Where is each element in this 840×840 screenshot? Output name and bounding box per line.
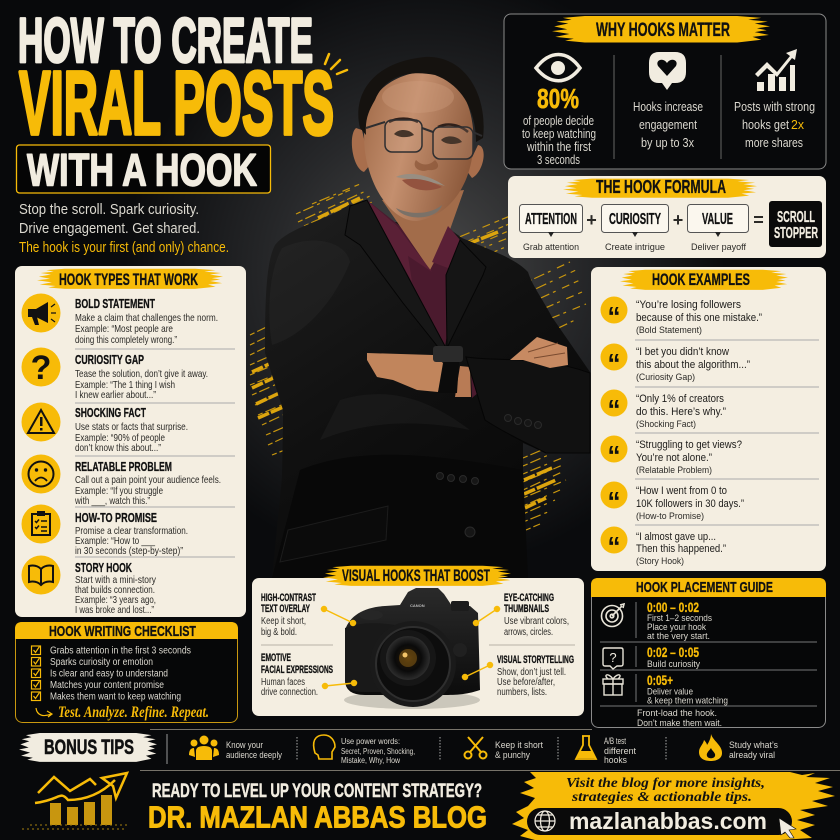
stat: shares (734, 49, 815, 150)
lapels (345, 200, 445, 352)
shirt (367, 200, 460, 346)
jacket cuff (466, 357, 590, 453)
stat: shares: more shares (745, 136, 803, 150)
plus: + (586, 210, 597, 230)
callout: visual storytelling: VISUAL STORYTELLING (497, 654, 574, 666)
stat: 80 percent: 3 seconds (537, 153, 580, 167)
heading banner: HOOK TYPES THAT WORK (59, 270, 198, 289)
formula: value (688, 204, 748, 253)
quote marks: “ (608, 348, 620, 378)
callout: emotive facial expressions (261, 652, 333, 698)
panel: why hooks matter (504, 14, 826, 169)
sleeve highlight (320, 394, 470, 440)
icon: open book (22, 556, 60, 594)
tip: ab test: A/B test (604, 736, 626, 746)
callout: high-contrast text overlay: Keep it short, (261, 616, 306, 627)
formula: curiosity: Create intrigue (605, 242, 665, 253)
callout: eye-catching thumbnails: THUMBNAILS (504, 603, 549, 615)
example quotes: 10K followers in 30 days.” (636, 498, 744, 510)
example quotes: do this. Here’s why.” (636, 406, 726, 418)
placement note: Front-load the hook. (637, 708, 717, 719)
placement header: HOOK PLACEMENT GUIDE (636, 579, 773, 596)
checklist items: Grabs attention in the first 3 seconds (50, 646, 191, 656)
callout: high-contrast text overlay: TEXT OVERLAY (261, 603, 310, 615)
hand (510, 337, 568, 368)
title line 2: VIRAL POSTS (19, 54, 334, 154)
hook type: how-to promise: Example: “How to ___ (75, 535, 155, 547)
title line 3 box: WITH A HOOK (27, 144, 257, 196)
tip: study: already viral (729, 750, 775, 761)
example quotes: this about the algorithm...” (636, 359, 750, 371)
hook type: story hook: that builds connection. (75, 584, 155, 596)
cuff buttons (436, 414, 542, 537)
stat: 80 percent: 80% (537, 83, 579, 114)
lower jacket shadow (272, 455, 528, 578)
hook type: how-to promise: HOW-TO PROMISE (75, 510, 157, 525)
title (16, 6, 347, 256)
placement step 2: 0:02 – 0:05 (647, 644, 699, 660)
quote marks: “ (608, 486, 620, 516)
url pill: mazlanabbas.com (569, 808, 767, 834)
icon: cursor (779, 818, 796, 838)
example tags: (Bold Statement) (636, 325, 702, 336)
placement step 1 (647, 599, 712, 642)
nose (415, 160, 438, 171)
collar (367, 200, 460, 282)
person portrait (265, 57, 590, 578)
hook type: bold statement: doing this completely wrong.” (75, 334, 177, 346)
hook type: story hook: Start with a mini-story (75, 574, 157, 586)
connector lines (322, 606, 500, 688)
illustration: camera: CANON (410, 603, 425, 608)
hook type: bold statement: Example: “Most people are (75, 323, 173, 335)
quote marks: “ (608, 301, 620, 331)
stat: shares: Posts with strong (734, 100, 815, 114)
example quotes: because of this one mistake.” (636, 312, 762, 324)
brush panel with link: Visit the blog for more insights, (566, 776, 765, 791)
callout: eye-catching thumbnails: arrows, circles. (504, 627, 553, 638)
quote marks (608, 301, 620, 561)
tip: power words: Use power words: (341, 736, 400, 746)
callout: emotive facial expressions: drive connection. (261, 687, 318, 698)
example quotes (636, 299, 762, 555)
hook type: bold statement (22, 294, 218, 346)
tip: short: & punchy (495, 750, 530, 761)
bonus tips banner: BONUS TIPS (44, 736, 134, 759)
example quotes: “I bet you didn’t know (636, 346, 729, 358)
hook type: shocking fact (22, 402, 188, 454)
panel: hook placement guide (591, 578, 826, 729)
hook type: shocking fact: Use stats or facts that surprise. (75, 421, 188, 433)
hook type: shocking fact: don’t know this about...” (75, 442, 161, 454)
icon: people (189, 736, 219, 760)
panel: visual hooks (252, 566, 584, 716)
hook type: curiosity gap: Tease the solution, don’t give it away. (75, 368, 208, 380)
icon: question mark (22, 348, 60, 387)
hook type: bold statement: BOLD STATEMENT (75, 296, 155, 311)
tip: study: Study what’s (729, 740, 778, 751)
hook type: curiosity gap: I knew earlier about...” (75, 389, 156, 401)
finger lines (528, 343, 565, 358)
heading banner: VISUAL HOOKS THAT BOOST (342, 566, 490, 585)
icon: question bubble (603, 648, 623, 669)
icon: clipboard (22, 504, 60, 544)
placement step 1: 0:00 – 0:02 (647, 599, 699, 615)
callout: visual storytelling (497, 654, 574, 698)
placement step 1: at the very start. (647, 631, 710, 642)
heading banner: THE HOOK FORMULA (596, 177, 726, 197)
hook type: curiosity gap: Example: “The 1 thing I wish (75, 379, 175, 391)
spotlight glow (110, 0, 740, 600)
hook type: how-to promise: in 30 seconds (step-by-step)” (75, 545, 183, 557)
formula: attention (520, 204, 582, 253)
jacket (265, 204, 590, 578)
example quotes: “How I went from 0 to (636, 485, 727, 497)
glasses (366, 120, 482, 159)
result: scroll stopper (769, 201, 822, 247)
hook type: curiosity gap: CURIOSITY GAP (75, 352, 144, 367)
icon: heart bubble (649, 52, 686, 90)
placement step 2 (647, 644, 700, 670)
formula: value: Deliver payoff (691, 242, 746, 253)
heading banner (37, 269, 223, 289)
tip: ab test (576, 736, 636, 765)
callout: eye-catching thumbnails (504, 592, 569, 638)
heading banner: HOOK EXAMPLES (652, 270, 750, 289)
mouth (402, 179, 442, 190)
heading banner: WHY HOOKS MATTER (596, 20, 730, 41)
callout: eye-catching thumbnails: Use vibrant colors, (504, 616, 569, 627)
callout: high-contrast text overlay (261, 592, 316, 638)
hook type: story hook: STORY HOOK (75, 560, 132, 575)
tip: short: Keep it short (495, 740, 543, 751)
hook type: relatable problem: RELATABLE PROBLEM (75, 459, 172, 474)
icon: gift (603, 675, 623, 695)
stat: shares: 2x (791, 118, 805, 132)
icon: scissors (464, 737, 486, 758)
callout: high-contrast text overlay: big & bold. (261, 627, 297, 638)
placement step 3: Deliver value (647, 686, 693, 698)
hook type: story hook: Example: “3 years ago, (75, 594, 156, 606)
checklist items (50, 646, 191, 702)
formula: attention: Grab attention (523, 242, 579, 253)
forehead highlight (382, 81, 454, 113)
hook type: relatable problem: with ___, watch this.” (74, 495, 150, 507)
example tags: (Curiosity Gap) (636, 372, 695, 383)
formula: value: VALUE (702, 211, 733, 228)
checklist items: Is clear and easy to understand (50, 668, 168, 680)
example quotes: “I almost gave up... (636, 531, 716, 543)
formula: curiosity: CURIOSITY (609, 211, 661, 228)
shirt cuff (471, 372, 479, 398)
stat: engagement: Hooks increase (633, 100, 703, 114)
placement note (637, 708, 722, 729)
callout: visual storytelling: numbers, lists. (497, 687, 547, 698)
example quotes: “Only 1% of creators (636, 393, 724, 405)
brush panel with link: strategies & actionable tips. (571, 790, 752, 805)
placement step 3: 0:05+ (647, 672, 673, 688)
quote marks: “ (608, 531, 620, 561)
example quotes: “Struggling to get views? (636, 439, 742, 451)
checklist items: Makes them want to keep watching (50, 692, 181, 702)
hair (358, 57, 484, 142)
hook type: how-to promise (22, 504, 188, 557)
callout: emotive facial expressions: FACIAL EXPRESSIONS (261, 664, 333, 676)
brush panel with link (512, 772, 835, 840)
stat: 80 percent: of people decide (523, 114, 594, 128)
jacket shoulder highlight (269, 240, 350, 345)
icon: globe (535, 811, 555, 831)
icon: sad face (22, 454, 60, 494)
formula: curiosity (602, 204, 668, 253)
watch (433, 346, 463, 393)
tip: study (699, 734, 778, 761)
tip: ab test: different (604, 746, 636, 756)
tip: audience: audience deeply (226, 750, 282, 761)
section: call to action (22, 772, 835, 840)
bonus tips banner (19, 733, 157, 762)
placement step 1: Place your hook (647, 622, 706, 633)
hook type: relatable problem: Call out a pain point your audience feels. (75, 474, 221, 486)
pocket (280, 506, 388, 562)
hook type: curiosity gap (22, 348, 208, 401)
arrow (36, 708, 52, 717)
checklist header: HOOK WRITING CHECKLIST (49, 623, 196, 640)
icon: question bubble: ? (609, 650, 617, 665)
panel: hook types (15, 266, 246, 617)
stat: 80 percent: to keep watching (522, 127, 596, 141)
result: scroll stopper: SCROLL (777, 209, 815, 226)
eyebrows (389, 119, 468, 132)
hook type: relatable problem: Example: “If you struggle (75, 485, 163, 497)
cta name: DR. MAZLAN ABBAS BLOG (148, 800, 487, 834)
heading banner (552, 16, 770, 43)
forearm (367, 353, 443, 392)
illustration: camera (344, 588, 480, 709)
hook type: story hook (22, 556, 157, 616)
example tags: (How-to Promise) (636, 511, 704, 522)
spark icon (325, 54, 347, 74)
tip: power words: Mistake, Why, How (341, 756, 400, 765)
icon: question mark: ? (31, 349, 51, 387)
icon: target (602, 604, 624, 626)
tagline: Drive engagement. Get shared. (19, 221, 200, 237)
quote marks: “ (608, 440, 620, 470)
tip: short (464, 737, 543, 761)
hook type: relatable problem (22, 454, 221, 507)
panel: hook examples (591, 267, 826, 571)
hook type: bold statement: Make a claim that challenges the norm. (75, 312, 218, 324)
title line 1: HOW TO CREATE (18, 6, 313, 76)
icon: head (314, 735, 335, 759)
example tags (636, 325, 712, 567)
example tags: (Story Hook) (636, 556, 684, 567)
checklist items: Matches your content promise (50, 680, 164, 691)
cta heading: READY TO LEVEL UP YOUR CONTENT STRATEGY? (152, 780, 482, 802)
wrist (455, 366, 471, 397)
stat: engagement: engagement (639, 118, 697, 132)
stat: 80 percent: within the first (526, 140, 591, 154)
tagline (19, 202, 229, 256)
panel: hook formula (508, 176, 826, 258)
placement step 3 (647, 672, 728, 706)
example quotes: You’re not alone.” (636, 452, 712, 464)
example tags: (Shocking Fact) (636, 419, 696, 430)
panel: hook writing checklist (15, 622, 238, 722)
hook type: shocking fact: SHOCKING FACT (75, 405, 146, 420)
equals: = (753, 210, 764, 230)
icon: growth chart (755, 49, 797, 91)
callout: emotive facial expressions: Human faces (261, 677, 305, 688)
stat: 80 percent (522, 54, 596, 167)
tip: power words: Secret, Proven, Shocking, (341, 747, 415, 756)
tagline: The hook is your first (and only) chance. (19, 240, 229, 256)
section: bonus tips (19, 733, 778, 765)
goatee (396, 205, 442, 217)
checkboxes (32, 646, 40, 700)
icon: flask (576, 736, 596, 759)
icon: flame (699, 734, 722, 761)
placement step 3: & keep them watching (647, 696, 728, 706)
callout: visual storytelling: Show, don’t just tell. (497, 667, 566, 678)
stat: shares: hooks get (742, 118, 789, 132)
eyes (394, 130, 462, 144)
formula: attention: ATTENTION (525, 211, 577, 228)
yellow paint splatter (250, 184, 586, 530)
example quotes: Then this happened.” (636, 543, 726, 555)
example quotes: “You’re losing followers (636, 299, 741, 311)
hook type: story hook: I was broke and lost...” (75, 604, 154, 616)
hook type: how-to promise: Promise a clear transformation. (75, 525, 188, 537)
icon: eye (536, 54, 580, 81)
placement step 2: Build curiosity (647, 659, 700, 670)
stat: engagement (633, 52, 703, 150)
face (364, 71, 473, 221)
quote icons (600, 296, 628, 554)
example tags: (Relatable Problem) (636, 465, 712, 476)
moustache (396, 174, 445, 186)
placement note: Don’t make them wait. (637, 718, 722, 729)
callout: eye-catching thumbnails: EYE-CATCHING (504, 592, 554, 604)
quote marks: “ (608, 394, 620, 424)
tip: ab test: hooks (604, 755, 627, 765)
stat: engagement: by up to 3x (641, 136, 695, 150)
heading banner (323, 566, 511, 586)
icon: growth chart (22, 773, 130, 829)
tip: power words (314, 735, 415, 765)
plus: + (673, 210, 683, 230)
placement step 1: First 1–2 seconds (647, 613, 712, 624)
tip: audience (189, 736, 282, 761)
hook type: shocking fact: Example: “90% of people (75, 432, 165, 444)
callout: emotive facial expressions: EMOTIVE (261, 652, 291, 664)
callout: visual storytelling: Use before/after, (497, 677, 555, 688)
icon: megaphone (22, 294, 60, 332)
tagline: Stop the scroll. Spark curiosity. (19, 202, 199, 218)
ears (352, 128, 484, 178)
slogan: Test. Analyze. Refine. Repeat. (58, 704, 209, 721)
callout: high-contrast text overlay: HIGH-CONTRAST (261, 592, 316, 604)
tip: audience: Know your (226, 740, 263, 751)
neck (382, 190, 464, 270)
icon: warning triangle (22, 402, 60, 442)
checklist items: Sparks curiosity or emotion (50, 657, 153, 668)
